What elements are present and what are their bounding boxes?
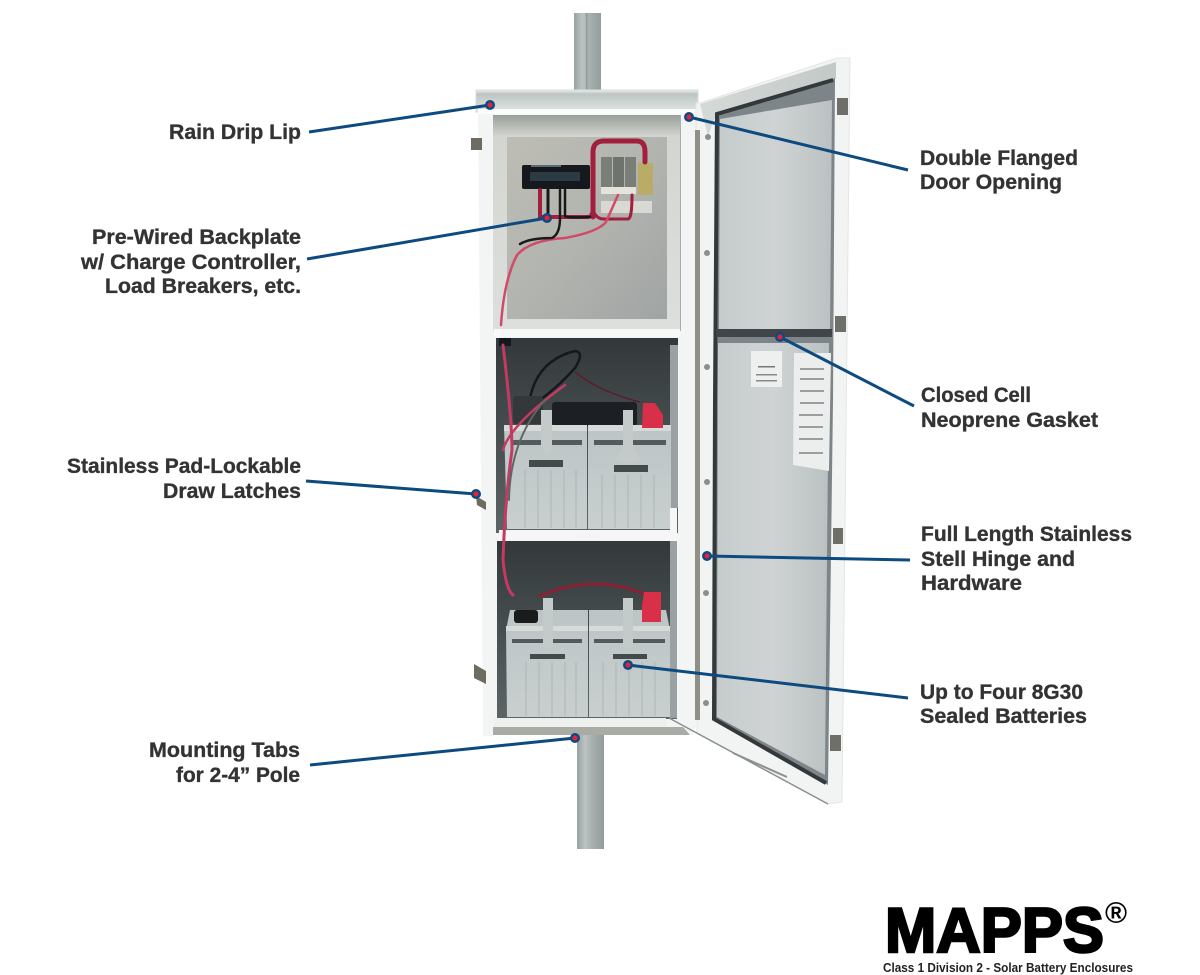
cabinet body frame [478, 110, 696, 736]
marker dot [485, 100, 495, 110]
lower pane [717, 343, 829, 775]
label [149, 739, 300, 787]
door top return [700, 62, 836, 136]
warning label large [793, 353, 831, 471]
label [920, 147, 1078, 194]
door clamps [830, 98, 848, 751]
red terminal cap [642, 403, 663, 428]
marker dot [471, 489, 481, 499]
upper left battery [504, 410, 587, 529]
label: for 2-4” Pole [176, 764, 300, 787]
upper compartment [493, 115, 681, 337]
lower compartment [494, 338, 678, 727]
leader line [707, 556, 910, 560]
door bottom edge [669, 718, 828, 804]
rain drip lip [476, 90, 698, 112]
upper right battery [588, 403, 671, 529]
marker dot [684, 112, 694, 122]
callout: rain drip lip [169, 100, 495, 144]
label: Double Flanged [920, 147, 1078, 170]
middle shelf [499, 508, 677, 541]
leader line [306, 481, 476, 494]
connector block [499, 338, 511, 346]
charge controller [522, 165, 590, 189]
label: Rain Drip Lip [169, 121, 301, 144]
middle gasket bar [716, 329, 832, 337]
enclosure cabinet [471, 90, 698, 736]
door outer frame [696, 58, 850, 804]
label: w/ Charge Controller, [80, 251, 301, 274]
label: Pre-Wired Backplate [92, 226, 301, 249]
callout: door opening [684, 112, 1078, 194]
label: Door Opening [920, 171, 1062, 194]
label: Stell Hinge and [921, 548, 1075, 571]
label: Sealed Batteries [920, 705, 1087, 728]
upper pane [719, 100, 832, 329]
lower right battery [589, 592, 670, 717]
label [80, 226, 301, 298]
label: Mounting Tabs [149, 739, 300, 762]
tagline: Class 1 Division 2 - Solar Battery Enclosures [883, 961, 1133, 975]
leader line [780, 337, 914, 406]
label: Up to Four 8G30 [920, 681, 1083, 704]
breakers [601, 157, 653, 213]
marker dot [570, 733, 580, 743]
label: Neoprene Gasket [921, 409, 1098, 432]
door catch rod [733, 753, 787, 777]
open door [669, 58, 850, 804]
marker dot [775, 332, 785, 342]
registered mark: ® [1105, 897, 1127, 930]
leader line [309, 105, 490, 132]
label: Draw Latches [163, 480, 301, 503]
label [921, 384, 1098, 432]
red wiring [501, 141, 645, 325]
leader line [628, 665, 908, 698]
MAPPS logo [883, 896, 1133, 975]
wordmark: MAPPS [885, 896, 1104, 966]
hinge screws [703, 134, 711, 706]
right side wall highlights [670, 345, 678, 718]
leader line [307, 218, 547, 259]
marker dot [542, 213, 552, 223]
callout: pre-wired backplate [80, 213, 552, 298]
leader line [310, 738, 575, 765]
gasket surround [713, 78, 835, 785]
lower left battery [506, 598, 588, 717]
hinge strip [695, 130, 700, 720]
label [920, 681, 1087, 728]
callout: neoprene gasket [775, 332, 1098, 432]
red terminal cap [642, 592, 661, 622]
marker dot [702, 551, 712, 561]
label: Stainless Pad-Lockable [67, 455, 301, 478]
gasket dark edge [714, 80, 833, 783]
leader line [689, 117, 908, 170]
label [67, 455, 301, 503]
mounting tab ledge [493, 727, 690, 735]
callout: mounting tabs [149, 733, 580, 787]
label [921, 523, 1132, 595]
label: Closed Cell [921, 384, 1031, 407]
shelf between upper and lower compartments [494, 329, 680, 337]
warning label small [751, 351, 782, 387]
cable loop [513, 351, 640, 426]
callout: draw latches [67, 455, 481, 503]
latches [471, 138, 486, 684]
backplate [507, 137, 667, 319]
galvanized pole, bottom section [577, 735, 604, 849]
galvanized pole, top section [574, 13, 601, 91]
red cables [503, 345, 650, 596]
marker dot [623, 660, 633, 670]
label: Full Length Stainless [921, 523, 1132, 546]
label: Hardware [921, 572, 1022, 595]
label: Load Breakers, etc. [105, 275, 301, 298]
callout: hinge and hardware [702, 523, 1132, 595]
cabinet bottom lip [494, 718, 666, 727]
callout: sealed batteries [623, 660, 1087, 728]
